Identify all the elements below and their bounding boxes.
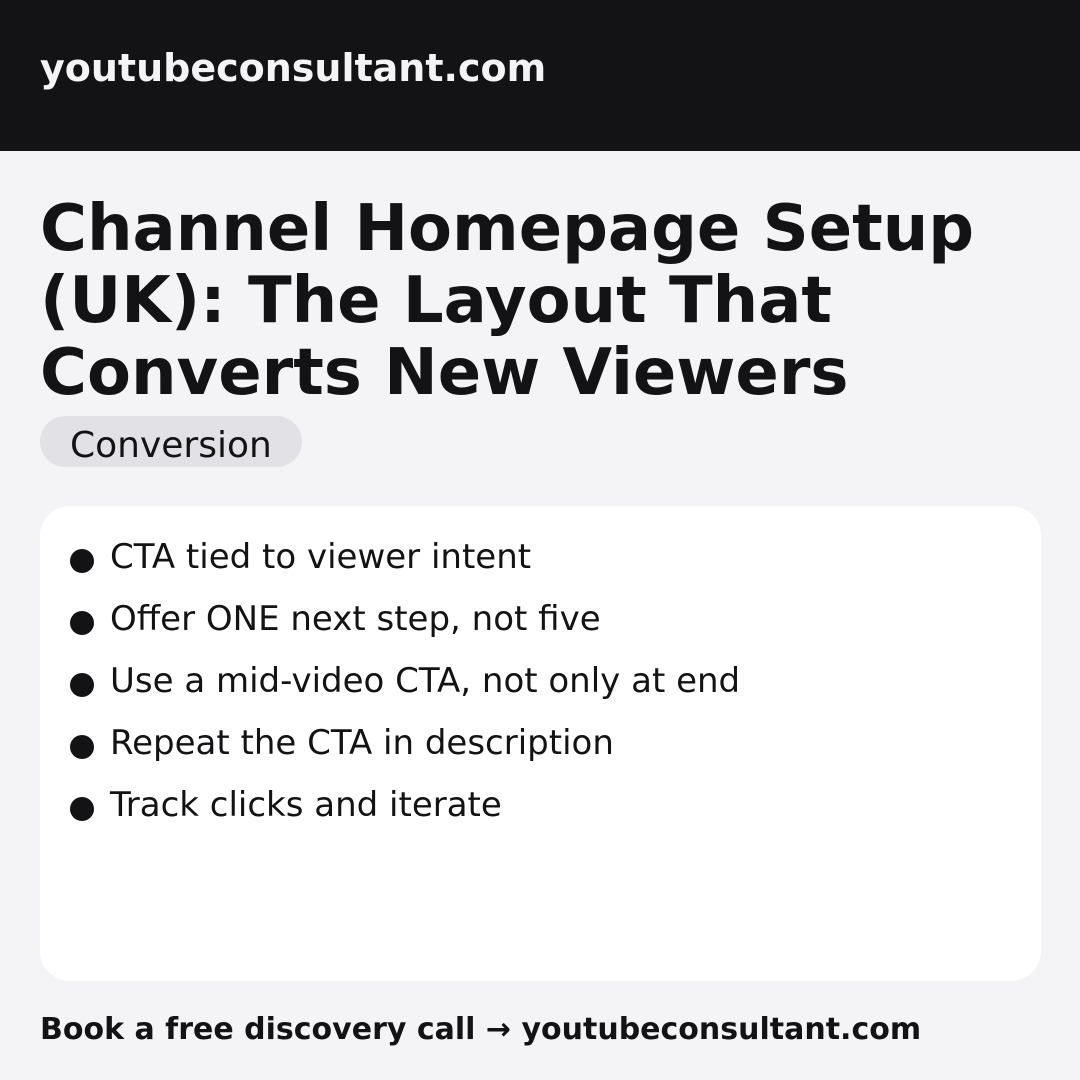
bullet item 4: Repeat the CTA in description — [110, 723, 614, 763]
tag pill: Conversion — [40, 416, 302, 467]
tag pill: Conversion: Conversion — [70, 425, 272, 466]
bullet item 2: Offer ONE next step, not five — [110, 599, 601, 639]
footer call to action: Book a free discovery call → youtubeconsultant.com — [40, 1012, 921, 1047]
panel: checklist card — [40, 506, 1041, 981]
title: Channel Homepage Setup (UK): The Layout That Converts New Viewers — [40, 192, 974, 410]
brand name: youtubeconsultant.com — [40, 46, 546, 90]
bullet item 1: CTA tied to viewer intent — [110, 537, 531, 577]
bullet item 3: Use a mid-video CTA, not only at end — [110, 661, 740, 701]
header bar — [0, 0, 1080, 151]
bullet item 5: Track clicks and iterate — [110, 785, 502, 825]
